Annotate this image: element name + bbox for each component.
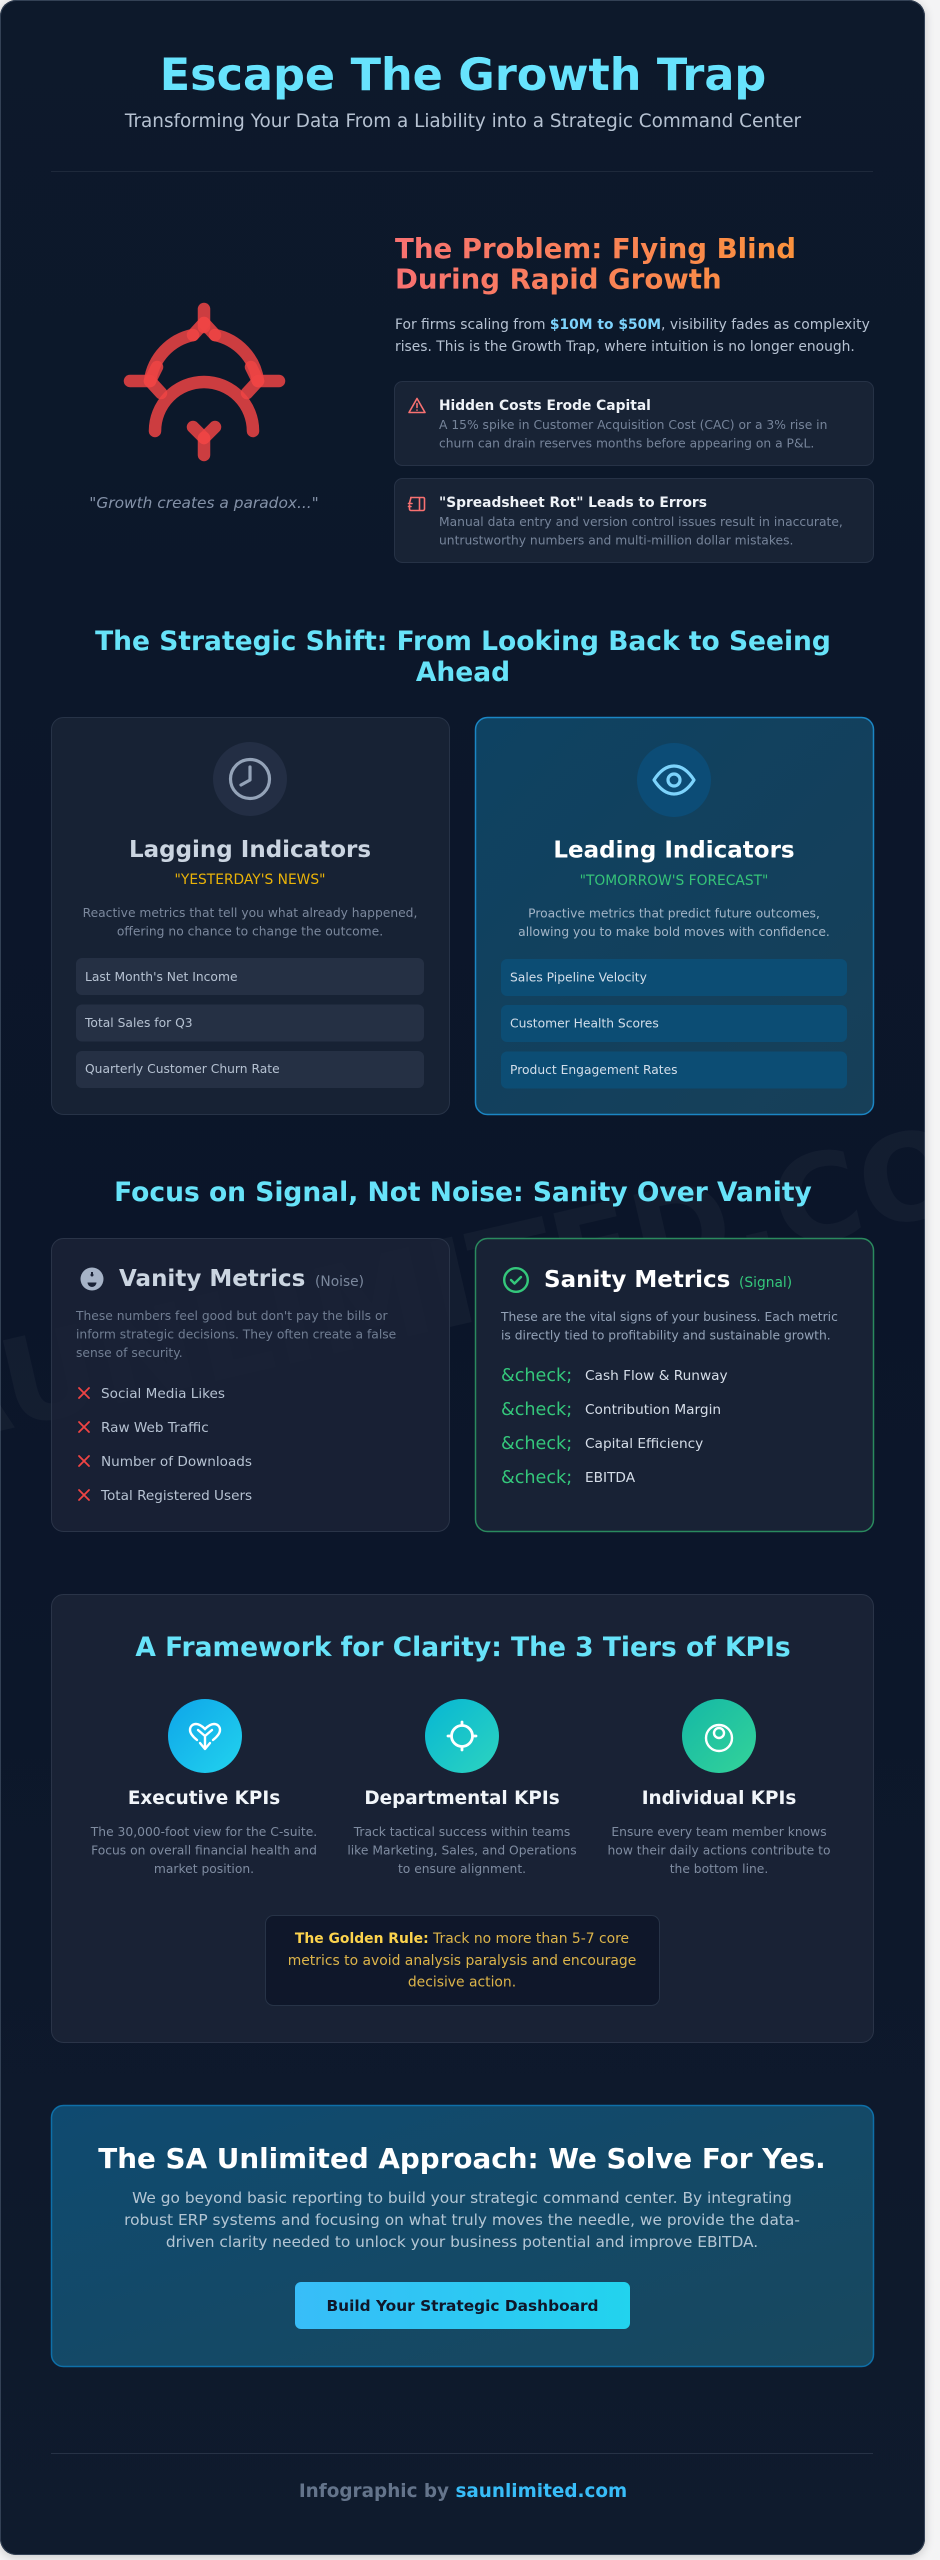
panel heading: Sanity Metrics — [544, 1267, 730, 1293]
problem intro: $10M to $50M, visibility fades as complexity — [550, 317, 870, 333]
description: inform strategic decisions. They often create a false — [76, 1328, 396, 1342]
panel: leading indicators — [476, 718, 874, 1114]
metric: total sales: Total Sales for Q3 — [84, 1016, 193, 1030]
problem heading: The Problem: Flying Blind — [395, 232, 796, 265]
metric: churn rate — [76, 1051, 424, 1088]
description: robust ERP systems and focusing on what truly moves the needle, we provide the data- — [124, 2211, 800, 2229]
panel: call to action — [52, 2106, 874, 2366]
description: Proactive metrics that predict future outcomes, — [528, 906, 820, 920]
tier: individual: Individual KPIs — [642, 1788, 796, 1809]
list: signal metrics: EBITDA — [585, 1470, 636, 1486]
icon: executive — [168, 1699, 242, 1773]
card: spreadsheet rot — [394, 478, 874, 562]
caption: "Growth creates a paradox..." — [89, 494, 319, 512]
metric: net income — [76, 958, 424, 995]
tier: departmental: like Marketing, Sales, and Operations — [347, 1844, 577, 1858]
tier: executive — [90, 1699, 317, 1876]
description: is directly tied to profitability and sustainable growth. — [501, 1328, 831, 1342]
button — [295, 2282, 630, 2329]
list: signal metrics — [501, 1366, 728, 1488]
list: signal metrics: Cash Flow & Runway — [585, 1368, 728, 1384]
section: the problem — [89, 232, 874, 562]
description: offering no chance to change the outcome. — [117, 924, 383, 938]
panel heading: A Framework for Clarity: The 3 Tiers of KPIs — [135, 1632, 791, 1663]
metric: churn rate: Quarterly Customer Churn Rate — [85, 1062, 280, 1076]
card text: "Spreadsheet Rot" Leads to Errors — [439, 495, 707, 511]
list: noise metrics: Total Registered Users — [100, 1488, 252, 1504]
illustration: growth paradox icon — [130, 309, 279, 455]
card: hidden costs: A 15% spike in Customer Acquisition Cost (CAC) or a 3% rise in — [439, 418, 827, 432]
icon: clock — [213, 742, 287, 816]
tier: departmental: Departmental KPIs — [364, 1788, 560, 1809]
callout: golden rule: The Golden Rule: Track no more than 5-7 core — [295, 1931, 629, 1947]
card: hidden costs — [394, 382, 874, 466]
tier: individual: Ensure every team member knows — [611, 1825, 827, 1839]
description: sense of security. — [76, 1346, 183, 1360]
metric: pipeline velocity — [501, 959, 847, 996]
icon: departmental — [425, 1699, 499, 1773]
card text: Hidden Costs Erode Capital — [439, 398, 651, 414]
panel heading: (Noise) — [315, 1274, 364, 1290]
tier: individual — [608, 1699, 830, 1876]
list: noise metrics: Raw Web Traffic — [101, 1420, 209, 1436]
description: driven clarity needed to unlock your business potential and improve EBITDA. — [166, 2233, 758, 2251]
list: signal metrics: &check; — [501, 1400, 572, 1420]
heading: strategic shift: The Strategic Shift: From Looking Back to Seeing — [95, 626, 831, 657]
header — [124, 50, 802, 132]
panel: KPI framework — [52, 1594, 874, 2042]
card: spreadsheet rot: untrustworthy numbers and multi-million dollar mistakes. — [439, 534, 793, 548]
tier: departmental — [347, 1699, 577, 1876]
panel heading: (Signal) — [739, 1275, 792, 1291]
problem intro: rises. This is the Growth Trap, where intuition is no longer enough. — [395, 339, 855, 355]
icon: individual — [682, 1699, 756, 1773]
icon: eye — [637, 743, 711, 817]
list: signal metrics: Capital Efficiency — [585, 1436, 703, 1452]
icon: check circle — [504, 1268, 528, 1292]
icon: warning triangle — [409, 398, 425, 412]
description: Reactive metrics that tell you what already happened, — [83, 906, 417, 920]
title: Escape The Growth Trap — [160, 50, 766, 101]
panel: lagging indicators — [52, 718, 450, 1114]
metric: net income: Last Month's Net Income — [85, 970, 238, 984]
tier: individual: the bottom line. — [670, 1862, 768, 1876]
description: allowing you to make bold moves with confidence. — [518, 925, 830, 939]
metric: engagement: Product Engagement Rates — [510, 1063, 678, 1077]
list: noise metrics: Social Media Likes — [101, 1386, 225, 1402]
tier: executive: Focus on overall financial health and — [91, 1844, 317, 1858]
tier: executive: Executive KPIs — [128, 1788, 280, 1809]
metric: total sales — [76, 1004, 424, 1042]
card: hidden costs: churn can drain reserves months before appearing on a P&L. — [439, 436, 814, 450]
list: signal metrics: &check; — [501, 1468, 572, 1488]
button: Build Your Strategic Dashboard — [326, 2297, 599, 2315]
tagline: "TOMORROW'S FORECAST" — [580, 873, 768, 889]
panel: sanity metrics — [476, 1238, 874, 1532]
list: noise metrics: Number of Downloads — [101, 1454, 252, 1470]
card: spreadsheet rot: Manual data entry and version control issues result in inaccurate, — [439, 515, 843, 529]
problem intro: For firms scaling from — [395, 317, 550, 333]
subtitle: Transforming Your Data From a Liability into a Strategic Command Center — [124, 111, 802, 132]
description: These are the vital signs of your business. Each metric — [500, 1310, 838, 1324]
tagline: "YESTERDAY'S NEWS" — [175, 872, 325, 888]
metric: engagement — [501, 1052, 847, 1088]
callout: golden rule: metrics to avoid analysis paralysis and encourage — [288, 1953, 636, 1969]
panel heading: Lagging Indicators — [129, 837, 371, 863]
icon: vanity face — [80, 1268, 104, 1290]
list: signal metrics: &check; — [501, 1366, 572, 1386]
callout: golden rule: decisive action. — [408, 1974, 516, 1990]
tier: executive: The 30,000-foot view for the C-suite. — [90, 1825, 317, 1839]
heading: signal not noise: Focus on Signal, Not Noise: Sanity Over Vanity — [114, 1177, 812, 1208]
list: signal metrics: Contribution Margin — [585, 1402, 721, 1418]
problem heading: During Rapid Growth — [395, 262, 722, 296]
list: signal metrics: &check; — [501, 1434, 572, 1454]
tier: departmental: Track tactical success within teams — [353, 1825, 570, 1839]
list: noise metrics — [79, 1386, 252, 1504]
description: We go beyond basic reporting to build your strategic command center. By integrating — [132, 2189, 792, 2207]
heading: strategic shift: Ahead — [416, 657, 510, 688]
panel heading: The SA Unlimited Approach: We Solve For Yes. — [98, 2142, 826, 2175]
panel heading: Leading Indicators — [553, 838, 795, 864]
footer: Infographic by saunlimited.com — [299, 2481, 627, 2502]
tier: executive: market position. — [154, 1862, 254, 1876]
metric: health scores — [501, 1005, 847, 1042]
description: These numbers feel good but don't pay the bills or — [75, 1309, 388, 1323]
callout: golden rule — [266, 1916, 660, 2006]
metric: health scores: Customer Health Scores — [510, 1016, 659, 1030]
metric: pipeline velocity: Sales Pipeline Velocity — [510, 970, 647, 984]
tier: departmental: to ensure alignment. — [398, 1862, 526, 1876]
icon: spreadsheet — [408, 498, 425, 510]
panel: vanity metrics — [52, 1238, 450, 1532]
tier: individual: how their daily actions contribute to — [608, 1844, 830, 1858]
panel heading: Vanity Metrics — [119, 1266, 305, 1292]
